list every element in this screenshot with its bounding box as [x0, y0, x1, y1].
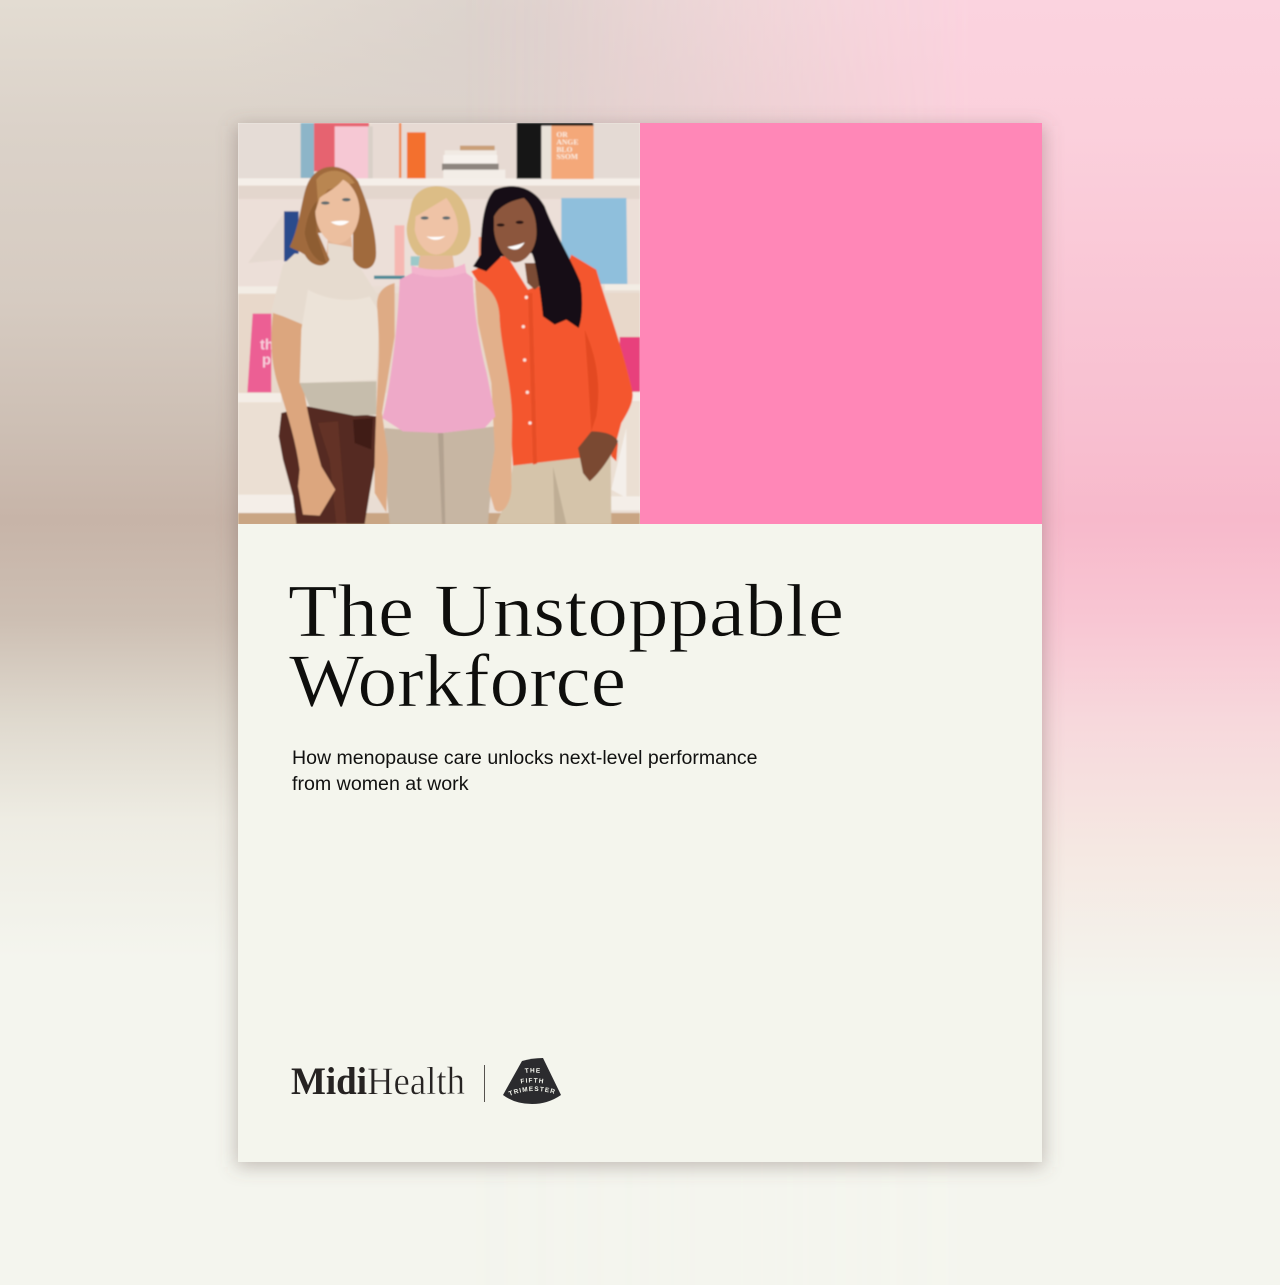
card paper panel: [238, 123, 1042, 1162]
shirt: [471, 255, 633, 466]
books: p: [262, 352, 271, 368]
hair: [407, 186, 471, 256]
logo: MidiHealth: Midi: [291, 1060, 367, 1103]
trousers: [496, 451, 611, 524]
hand: [578, 431, 618, 481]
hair: [290, 167, 376, 269]
subtitle: from women at work: [292, 774, 469, 795]
top: [382, 264, 495, 433]
card shadow: [236, 126, 1044, 1167]
books: OR: [556, 130, 568, 139]
logo: MidiHealth: Health: [367, 1060, 465, 1103]
photo: three women in front of a bookshelf: [238, 123, 640, 525]
arms: [375, 283, 395, 512]
woman centre: [375, 186, 512, 524]
neck: [418, 254, 455, 270]
title: The Unstoppable: [288, 570, 844, 653]
title: Workforce: [289, 640, 626, 723]
top: [276, 242, 370, 416]
pink colour block: [640, 123, 1042, 524]
hair: [473, 186, 582, 328]
woman left: [271, 167, 384, 524]
arm: [271, 313, 335, 516]
face: [494, 198, 536, 262]
logo: The Fifth Trimester badge: TRIMESTER: [508, 1086, 555, 1096]
neck: [326, 236, 354, 255]
logo divider: [484, 1065, 485, 1102]
logo: The Fifth Trimester badge: [503, 1058, 561, 1104]
face: [315, 180, 360, 244]
blurred gradient background: [0, 0, 1280, 908]
logo: The Fifth Trimester badge: FIFTH: [520, 1078, 544, 1084]
books: th: [260, 338, 274, 354]
logo: MidiHealth: [291, 1060, 465, 1103]
books: ANGE: [556, 138, 578, 147]
woman right: [471, 186, 633, 524]
books: [247, 123, 640, 498]
chest: [524, 262, 541, 290]
face: [415, 198, 458, 255]
logo: The Fifth Trimester badge: THE: [524, 1068, 540, 1073]
trousers: [279, 406, 376, 524]
trousers: [383, 426, 496, 524]
subtitle: How menopause care unlocks next-level performance: [292, 748, 758, 769]
books: SSOM: [556, 152, 578, 161]
bookshelf: [238, 123, 640, 525]
title: [288, 570, 844, 723]
books: BLO: [556, 145, 573, 154]
subtitle: [292, 748, 758, 795]
report cover card: [226, 117, 1054, 1176]
